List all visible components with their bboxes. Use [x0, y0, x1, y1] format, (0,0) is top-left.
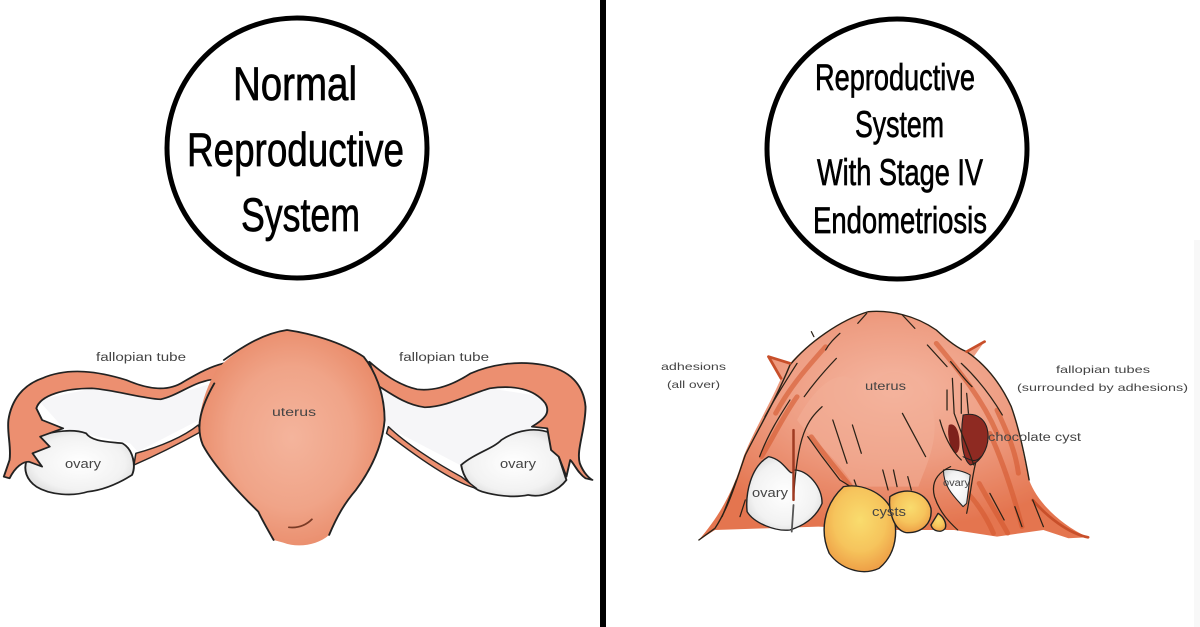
badge: reproductive system with stage IV endometriosis: Endometriosis [813, 200, 987, 241]
adhesion strands [722, 313, 1043, 530]
left ovary [747, 457, 822, 530]
label: adhesions: adhesions [661, 361, 726, 373]
label: ovary left: ovary [65, 457, 102, 471]
left ovary [25, 431, 134, 494]
label: fallopian tubes: (surrounded by adhesions) [1017, 382, 1188, 394]
cysts [824, 486, 946, 572]
badge: reproductive system with stage IV endometriosis: With Stage IV [817, 152, 983, 193]
label: uterus left: uterus [272, 405, 316, 419]
label: cysts: cysts [872, 505, 906, 519]
adhesion mass [699, 311, 1088, 540]
badge: normal reproductive system: System [241, 188, 360, 241]
label: chocolate cyst: chocolate cyst [988, 432, 1082, 444]
illustration: stage IV endometriosis [699, 311, 1088, 572]
center divider [600, 0, 606, 627]
right fallopian tube [369, 362, 592, 488]
label: ovary left stage IV: ovary [752, 486, 789, 500]
badge: normal reproductive system [167, 18, 427, 278]
label: adhesions [661, 361, 726, 391]
label: fallopian tube left: fallopian tube [96, 352, 186, 364]
label: fallopian tubes: fallopian tubes [1056, 364, 1150, 376]
right ovary [943, 470, 970, 507]
label: uterus right: uterus [865, 379, 906, 393]
label: fallopian tube right: fallopian tube [399, 352, 489, 364]
right ovary [461, 430, 566, 496]
label: ovary right: ovary [500, 457, 537, 471]
badge: reproductive system with stage IV endometriosis [767, 19, 1027, 279]
badge: reproductive system with stage IV endometriosis: Reproductive [815, 57, 975, 98]
badge: reproductive system with stage IV endometriosis: System [855, 104, 944, 145]
left fallopian tube [4, 363, 224, 478]
illustration: normal reproductive system [4, 330, 592, 545]
label: fallopian tubes [1017, 364, 1188, 394]
badge: normal reproductive system: Normal [233, 57, 357, 110]
badge: normal reproductive system: Reproductive [187, 123, 404, 176]
uterus [199, 330, 385, 545]
ligament fill right [377, 383, 551, 467]
chocolate cyst [948, 414, 988, 465]
label: adhesions: (all over) [667, 379, 720, 391]
ligament fill left [38, 383, 212, 452]
label: ovary right stage IV: ovary [943, 478, 970, 489]
